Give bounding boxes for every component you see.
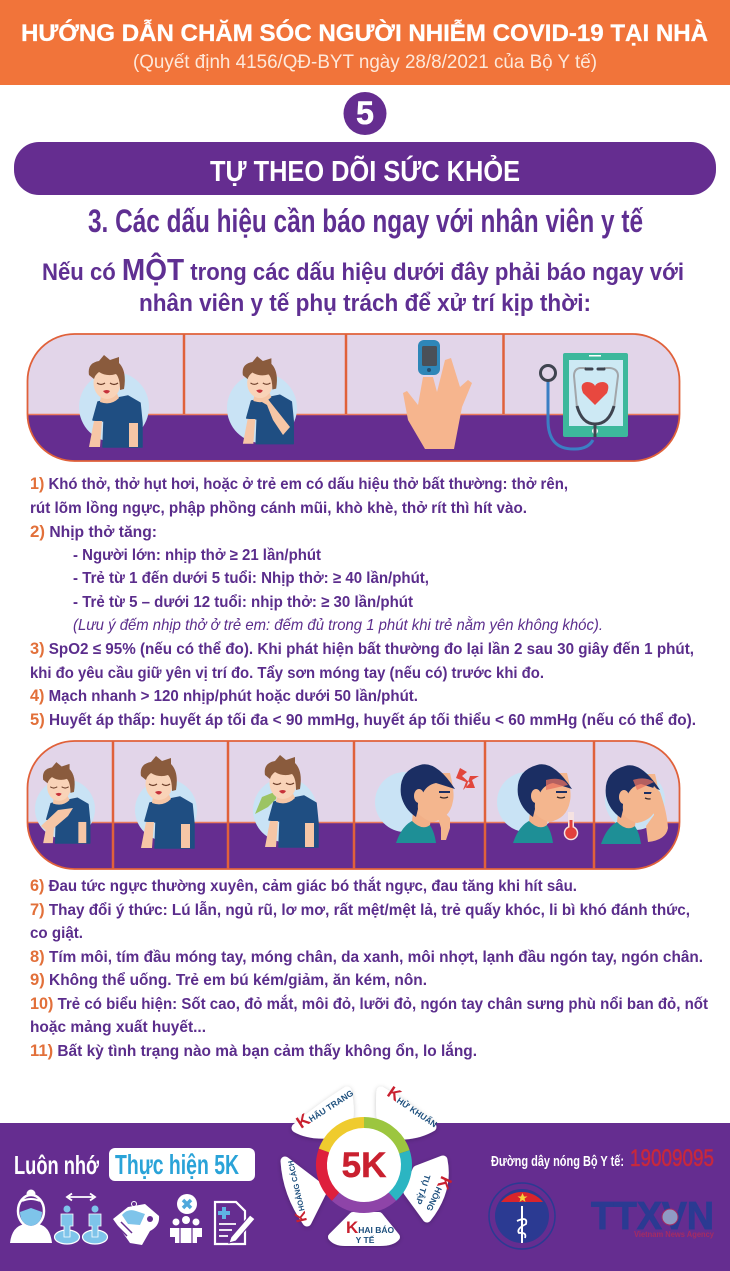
item 10: hoặc mảng xuất huyết... (30, 1019, 206, 1036)
item 5: 5) Huyết áp thấp: huyết áp tối đa < 90 mmHg, huyết áp tối thiểu < 60 mmHg (nếu có thể đo). (30, 710, 696, 729)
header banner (0, 0, 730, 85)
petal: khử khuẩn: KHỬ KHUẨN (384, 1083, 443, 1131)
icon: tablet with stethoscope and heart (540, 353, 628, 449)
petal: khẩu trang: KHẨU TRANG (293, 1082, 357, 1132)
intro text: Nếu có MỘT trong các dấu hiệu dưới đây phải báo ngay với (42, 251, 684, 287)
symptom list 1 to 5 (30, 474, 696, 729)
illustration strip 1 (27, 334, 680, 461)
illustration strip 2 (27, 741, 680, 869)
item 6: 6) Đau tức ngực thường xuyên, cảm giác bó thắt ngực, đau tăng khi hít sâu. (30, 876, 577, 895)
icon: two people keeping distance (54, 1194, 108, 1244)
item 2: - Trẻ từ 1 đến dưới 5 tuổi: Nhịp thở: ≥ 40 lần/phút, (73, 569, 429, 587)
section banner: TỰ THEO DÕI SỨC KHỎE (210, 154, 520, 188)
intro text: nhân viên y tế phụ trách để xử trí kịp thời: (139, 290, 591, 317)
item 7 (30, 900, 690, 942)
logo: ministry of health (489, 1183, 555, 1249)
reminder pill: Thực hiện 5K (115, 1149, 239, 1180)
item 7: co giật. (30, 925, 83, 942)
item 8: 8) Tím môi, tím đầu móng tay, móng chân, da xanh, môi nhợt, lạnh đầu ngón tay, ngón chân. (30, 947, 703, 966)
symptom list 6 to 11 (30, 876, 709, 1060)
item 3: khi đo yêu cầu giữ yên vị trí đo. Tẩy sơn móng tay (nếu có) trước khi đo. (30, 664, 544, 682)
item 3 (30, 639, 694, 682)
petal: không tụ tập (408, 1160, 456, 1218)
petal: khai báo y tế (332, 1216, 396, 1245)
icon: man with chest pain (35, 762, 95, 843)
icon: man with headache (601, 765, 668, 844)
petal: không tụ tập: TỤ TẬP (414, 1173, 434, 1206)
petal: khai báo y tế: KHAI BÁO (346, 1218, 395, 1237)
icon: man drowsy (135, 756, 197, 848)
item 2 (30, 522, 603, 634)
item 2: 2) Nhịp thở tăng: (30, 522, 157, 541)
footer band (0, 1123, 730, 1271)
icon: pulse oximeter on hand (403, 340, 472, 449)
item 1: rút lõm lồng ngực, phập phồng cánh mũi, khò khè, thở rít thì hít vào. (30, 500, 527, 517)
ring and 5K label: 5K (342, 1146, 386, 1185)
hotline label: Đường dây nóng Bộ Y tế: (491, 1154, 624, 1170)
icon: man with fever and thermometer (497, 764, 578, 843)
icon: man vomiting (253, 755, 318, 847)
petal: khai báo y tế: Y TẾ (356, 1235, 375, 1245)
item 1: 1) Khó thở, thở hụt hơi, hoặc ở trẻ em có dấu hiệu thở bất thường: thở rên, (30, 474, 568, 493)
item 2: - Trẻ từ 5 – dưới 12 tuổi: nhịp thở: ≥ 30 lần/phút (73, 593, 414, 611)
item 2: - Người lớn: nhịp thở ≥ 21 lần/phút (73, 547, 322, 564)
icon: washing hands (113, 1202, 159, 1245)
icon: woman wearing mask (10, 1190, 52, 1243)
step number badge: 5 (356, 95, 374, 131)
logo: TTXVN: TTXVN (591, 1195, 714, 1238)
icon: man short of breath (79, 355, 149, 447)
item 1 (30, 474, 568, 517)
item 9: 9) Không thể uống. Trẻ em bú kém/giảm, ăn kém, nôn. (30, 970, 427, 989)
item 10: 10) Trẻ có biểu hiện: Sốt cao, đỏ mắt, môi đỏ, lưỡi đỏ, ngón tay chân sưng phù nổi ban đỏ, nốt (30, 994, 709, 1013)
petal: khoảng cách: KHOẢNG CÁCH (280, 1159, 311, 1224)
subtitle: (Quyết định 4156/QĐ-BYT ngày 28/8/2021 của Bộ Y tế) (133, 52, 597, 73)
item 2: (Lưu ý đếm nhịp thở ở trẻ em: đếm đủ trong 1 phút khi trẻ nằm yên không khóc). (73, 615, 603, 634)
reminder label: Luôn nhớ (14, 1150, 99, 1180)
icon: health declaration form (215, 1202, 255, 1244)
item 11: 11) Bất kỳ tình trạng nào mà bạn cảm thấy không ổn, lo lắng. (30, 1041, 477, 1060)
item 7: 7) Thay đổi ý thức: Lú lẫn, ngủ rũ, lơ mơ, rất mệt/mệt lả, trẻ quấy khóc, li bì khó đánh thức, (30, 900, 690, 919)
item 3: 3) SpO2 ≤ 95% (nếu có thể đo). Khi phát hiện bất thường đo lại lần 2 sau 30 giây đến 1 phút, (30, 639, 694, 658)
icon: man coughing holding throat (227, 356, 297, 444)
step number badge (344, 92, 386, 135)
5K diagram (280, 1082, 456, 1245)
icon: no gatherings (170, 1194, 202, 1244)
item 10 (30, 994, 709, 1036)
intro text (42, 251, 684, 317)
petal: khoảng cách (280, 1159, 323, 1224)
main title: HƯỚNG DẪN CHĂM SÓC NGƯỜI NHIỄM COVID-19 TẠI NHÀ (21, 18, 708, 47)
ring and 5K label (321, 1122, 406, 1207)
item 4: 4) Mạch nhanh > 120 nhịp/phút hoặc dưới 50 lần/phút. (30, 686, 418, 705)
icon: man coughing side view (375, 764, 479, 843)
section banner (14, 142, 716, 195)
logo: TTXVN: Vietnam News Agency (634, 1230, 715, 1239)
petal: không tụ tập: KHÔNG (422, 1173, 456, 1216)
